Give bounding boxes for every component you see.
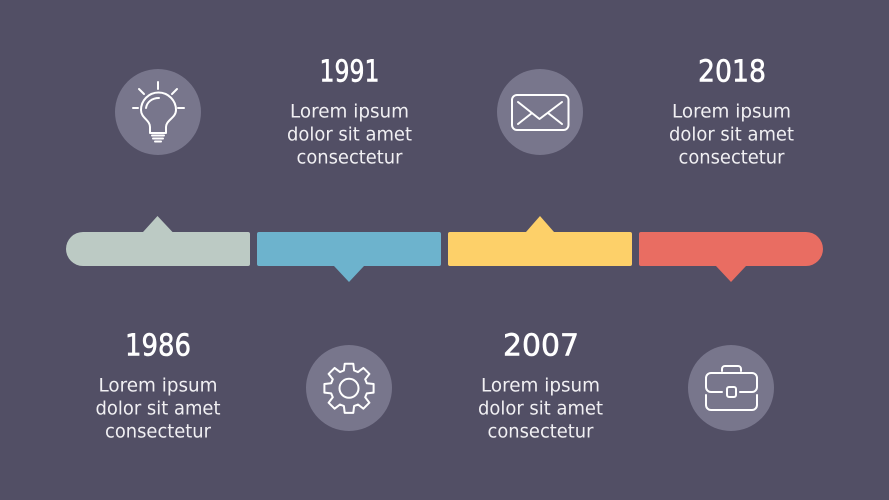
milestone 2007 <box>478 328 603 442</box>
milestone 1991 <box>287 54 412 168</box>
year 2007: 2007 <box>503 328 579 364</box>
description 1986 <box>96 374 220 442</box>
icon: briefcase <box>688 345 774 431</box>
year 2018: 2018 <box>698 54 766 90</box>
description 1986: consectetur <box>105 420 211 442</box>
description 2018 <box>669 100 794 168</box>
description 1991: dolor sit amet <box>287 124 412 146</box>
description 1986: dolor sit amet <box>96 398 220 420</box>
description 2007: consectetur <box>488 420 594 442</box>
milestone 2018 <box>669 54 794 168</box>
segment 1: sage with up pointer <box>66 216 250 266</box>
icon: gear <box>306 345 392 431</box>
year 1986: 1986 <box>125 328 191 364</box>
description 2018: dolor sit amet <box>669 124 794 146</box>
icon: envelope <box>497 69 583 155</box>
description 1991: consectetur <box>296 146 403 168</box>
description 2007: Lorem ipsum <box>481 374 600 396</box>
milestone 1986 <box>96 328 220 442</box>
segment 3: yellow with up pointer <box>448 216 632 266</box>
description 2007 <box>478 374 603 442</box>
timeline bar <box>66 216 823 282</box>
icon: light bulb <box>115 69 201 155</box>
description 2018: consectetur <box>678 146 785 168</box>
segment 4: coral with down pointer <box>639 232 823 282</box>
description 1986: Lorem ipsum <box>98 374 218 396</box>
description 2007: dolor sit amet <box>478 398 603 420</box>
year 1991: 1991 <box>320 54 380 90</box>
description 1991 <box>287 100 412 168</box>
segment 2: blue with down pointer <box>257 232 441 282</box>
description 2018: Lorem ipsum <box>672 100 791 122</box>
description 1991: Lorem ipsum <box>290 100 409 122</box>
